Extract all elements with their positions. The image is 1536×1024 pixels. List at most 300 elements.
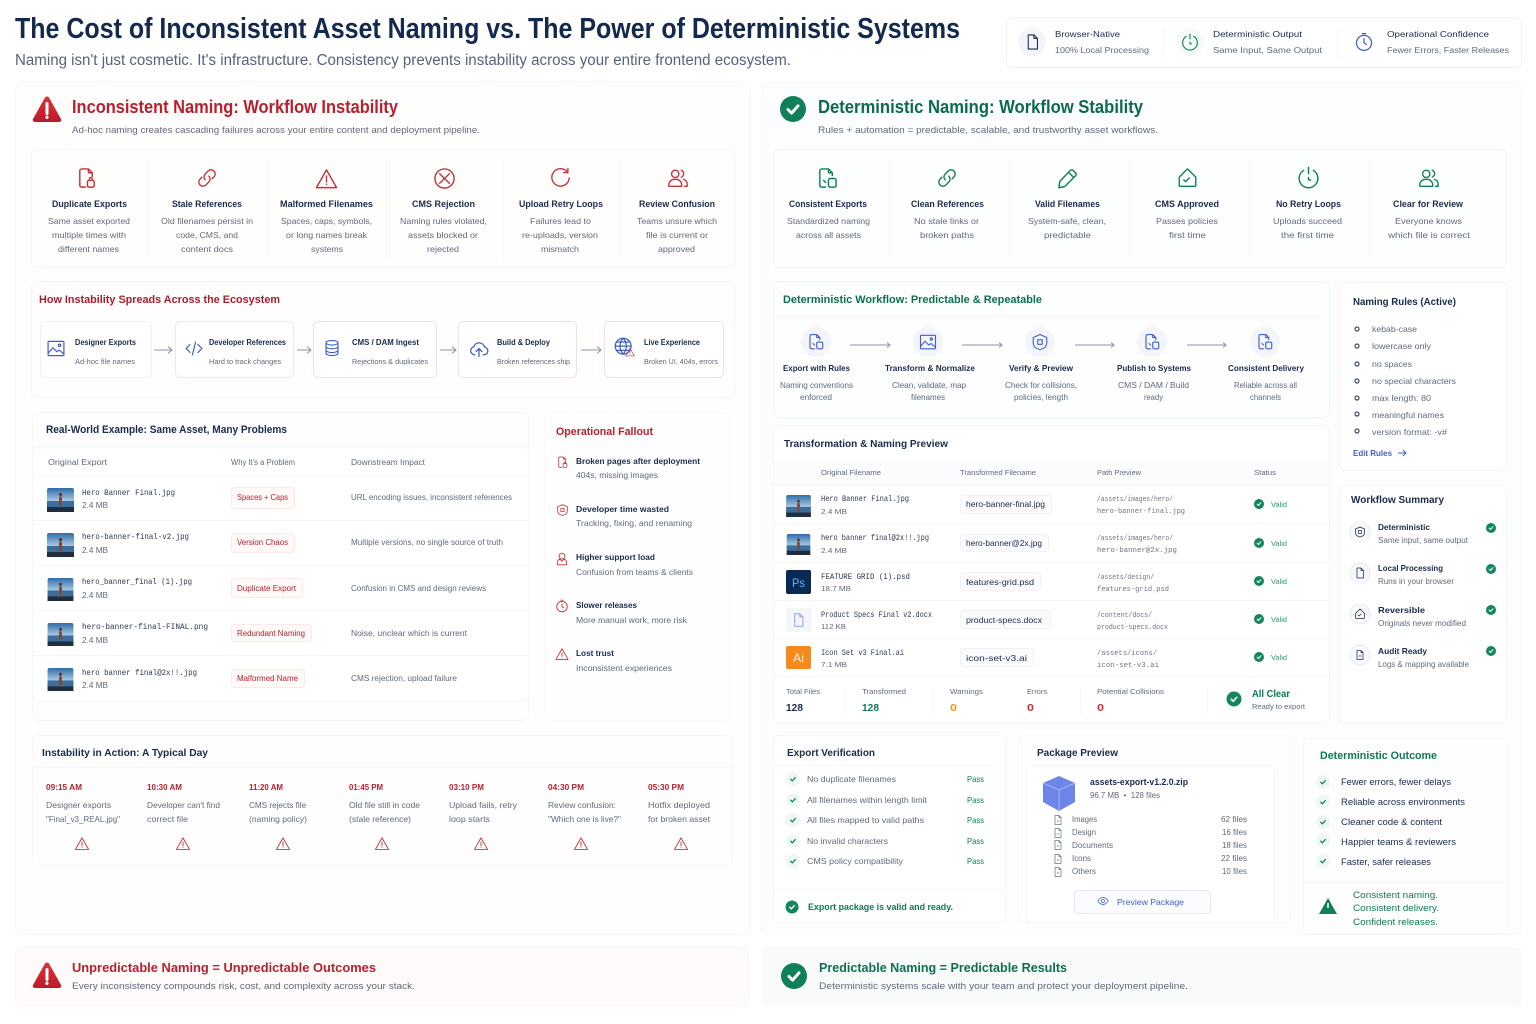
outcomes list: Happier teams & reviewers (1341, 837, 1457, 847)
benefit: consistent exports: across all assets (796, 230, 861, 240)
row: duplicate export: Confusion in CMS and design reviews (351, 584, 486, 593)
benefit: valid filenames: System-safe, clean, (1028, 216, 1106, 226)
event 10:30: Developer can't find (147, 800, 220, 810)
fallout: slower releases (557, 600, 688, 625)
check: no duplicate filenames: No duplicate filenames (807, 774, 896, 784)
badge: operational confidence: Fewer Errors, Faster Releases (1387, 45, 1509, 55)
preview row: hero banner final (786, 495, 1287, 517)
preview row: hero banner final: hero-banner-final.jpg (1097, 508, 1185, 516)
preview row: hero banner 2x (787, 534, 1287, 555)
preview table header: Original Filename (821, 468, 881, 477)
badge strip: product qualities (1006, 18, 1522, 68)
row: spaces + caps: Hero Banner Final.jpg (82, 488, 175, 498)
rules list: max length: 80 (1372, 393, 1431, 403)
benefit: no retry loops: No Retry Loops (1276, 199, 1341, 209)
badge: deterministic output: Same Input, Same Output (1213, 45, 1323, 55)
check: invalid characters: No invalid characters (807, 836, 888, 846)
problem: malformed filenames: systems (311, 244, 343, 254)
check: cms policy (786, 854, 984, 868)
row: duplicate export: 2.4 MB (82, 591, 108, 600)
timeline: a typical day (32, 736, 732, 866)
preview row: product specs: product-specs.docx (966, 615, 1043, 625)
callout: unpredictable outcomes: Every inconsistency compounds risk, cost, and complexity across your stack. (72, 981, 415, 992)
fallout: support load: Higher support load (576, 552, 655, 562)
panel heading: inconsistent: Inconsistent Naming: Workflow Instability (72, 97, 398, 117)
event 10:30: 10:30 AM (147, 783, 182, 792)
step: export with rules: Export with Rules (783, 363, 850, 373)
event 09:15: Designer exports (46, 800, 111, 810)
row: malformed name: hero banner final@2x!!.jpg (82, 668, 197, 678)
card: real-world example table: Real-World Example: Same Asset, Many Problems (46, 424, 287, 436)
card: package preview: Package Preview (1037, 748, 1118, 759)
problem: stale references: Stale References (172, 199, 242, 209)
badge: browser-native: 100% Local Processing (1055, 45, 1149, 55)
flow step: live experience: Broken UI, 404s, errors (644, 357, 718, 366)
benefit: clear for review: Clear for Review (1393, 199, 1464, 209)
callout: unpredictable outcomes (16, 948, 748, 1006)
step: transform and normalize: filenames (911, 393, 945, 402)
flow: deterministic workflow (774, 282, 1330, 418)
check: invalid characters (786, 834, 984, 848)
step: transform and normalize: Clean, validate, map (892, 381, 967, 390)
arrow (154, 346, 172, 354)
row: redundant naming: 2.4 MB (82, 636, 108, 645)
preview row: icon set: Valid (1271, 653, 1287, 662)
summary: reversible: Reversible (1378, 605, 1425, 615)
preview row: hero banner 2x: hero-banner@2x.jpg (966, 538, 1042, 548)
preview row: product specs (786, 608, 1287, 632)
row: spaces + caps: URL encoding issues, inconsistent references (351, 493, 512, 502)
badge: operational confidence (1356, 29, 1509, 55)
flow: deterministic workflow: Deterministic Workflow: Predictable & Repeatable (783, 294, 1042, 306)
card: export verification (774, 736, 1006, 922)
benefit: clear for review: Everyone knows (1395, 216, 1462, 226)
fallout: slower releases: Slower releases (576, 600, 637, 610)
card: workflow summary: Workflow Summary (1351, 495, 1444, 506)
problem: duplicate exports (48, 169, 130, 254)
outcomes list: Reliable across environments (1341, 797, 1466, 807)
benefit: cms approved: Passes policies (1156, 216, 1218, 226)
problem: malformed filenames: Spaces, caps, symbols, (281, 216, 372, 226)
problem: cms rejection: Naming rules violated, (400, 216, 487, 226)
row: redundant naming: hero-banner-final-FINAL.png (82, 622, 208, 632)
step: consistent delivery: Reliable across all (1234, 381, 1297, 390)
event 03:10: Upload fails, retry (449, 800, 518, 810)
rules list: no special characters (1372, 376, 1456, 386)
check: no duplicate filenames: Pass (967, 774, 984, 784)
problem: malformed filenames: Malformed Filenames (280, 199, 373, 209)
row: malformed name (48, 668, 458, 691)
stat: warnings (950, 687, 983, 714)
problem: upload retry loops: Upload Retry Loops (519, 199, 603, 209)
fallout: slower releases: More manual work, more risk (576, 615, 688, 625)
check: length limit: All filenames within length limit (807, 795, 928, 805)
event 11:20 (249, 783, 307, 849)
summary: deterministic: Same input, same output (1378, 536, 1469, 545)
preview row: hero banner final: Hero Banner Final.jpg (821, 495, 909, 504)
flow step: build and deploy (458, 322, 576, 378)
outcomes list: Fewer errors, fewer delays (1341, 777, 1452, 787)
event 10:30: correct file (147, 814, 188, 824)
problem: malformed filenames: or long names break (286, 230, 368, 240)
arrow (1187, 342, 1226, 348)
callout: predictable results: Predictable Naming = Predictable Results (819, 960, 1067, 975)
problem: duplicate exports: Duplicate Exports (52, 199, 127, 209)
problem: review confusion (637, 170, 717, 254)
step: publish to systems: ready (1144, 393, 1163, 402)
stat: warnings: 0 (950, 702, 957, 714)
link: edit rules: Edit Rules (1353, 448, 1392, 458)
preview row: product specs: /content/docs/ (1097, 612, 1152, 620)
summary: audit ready (1350, 645, 1496, 669)
stat: total files (786, 687, 820, 714)
benefit: valid filenames: Valid Filenames (1035, 199, 1100, 209)
fallout: developer time: Tracking, fixing, and renaming (576, 518, 692, 528)
preview row: hero banner final: Valid (1271, 500, 1287, 509)
row: version chaos: 2.4 MB (82, 546, 108, 555)
preview row: icon set (786, 646, 1287, 670)
stats row (786, 687, 1306, 714)
card: package preview (1018, 736, 1290, 922)
flow step: designer exports: Ad-hoc file names (75, 357, 135, 366)
problem: review confusion: Review Confusion (639, 199, 715, 209)
step: verify and preview: Verify & Preview (1009, 363, 1073, 373)
preview row: icon set: icon-set-v3.ai (1097, 662, 1159, 670)
problem: review confusion: file is current or (646, 230, 708, 240)
package name: assets-export-v1.2.0.zip (1090, 777, 1188, 787)
card: deterministic outcome: Deterministic Outcome (1320, 750, 1437, 762)
row: version chaos (47, 532, 503, 557)
problem: upload retry loops: re-uploads, version (522, 230, 598, 240)
table header: Downstream Impact (351, 458, 426, 467)
step: export with rules: enforced (800, 393, 832, 402)
flow step: live experience (604, 322, 724, 378)
event 09:15 (46, 783, 120, 849)
panel heading: inconsistent (33, 96, 480, 136)
event 01:45 (349, 783, 420, 849)
panel heading: deterministic: Deterministic Naming: Workflow Stability (818, 97, 1143, 117)
step: export with rules: Naming conventions (780, 381, 853, 390)
preview row: icon set: icon-set-v3.ai (966, 653, 1027, 663)
rules list: no spaces (1372, 359, 1412, 369)
subtitle: Naming isn't just cosmetic. It's infrastructure. Consistency prevents instability across your entire frontend ecosystem. (15, 52, 791, 69)
event 03:10 (449, 783, 518, 849)
status: all clear: Ready to export (1252, 702, 1306, 711)
rules list: meaningful names (1372, 410, 1444, 420)
rules list: kebab-case (1372, 324, 1417, 334)
problem: cms rejection: rejected (427, 244, 459, 254)
preview row: icon set: 7.1 MB (821, 660, 847, 669)
arrow (850, 342, 890, 348)
flow step: designer exports (40, 322, 152, 378)
stat: total files: Total Files (786, 687, 820, 696)
fallout: lost trust: Inconsistent experiences (576, 663, 672, 673)
event 11:20: CMS rejects file (249, 800, 306, 810)
preview row: product specs: 112 KB (821, 622, 846, 631)
check: cms policy: CMS policy compatibility (807, 856, 904, 866)
event 09:15: 09:15 AM (46, 783, 82, 792)
package contents list: Others (1072, 867, 1096, 876)
card: operational fallout: Operational Fallout (556, 426, 653, 438)
stat: transformed: 128 (862, 702, 879, 714)
rules list: lowercase only (1372, 341, 1432, 351)
benefit: clean references: No stale links or (914, 216, 979, 226)
card: deterministic outcome (1304, 738, 1508, 934)
summary: local processing (1350, 563, 1496, 586)
arrow (962, 342, 1002, 348)
preview row: product specs: product-specs.docx (1097, 624, 1168, 632)
flow step: live experience: Live Experience (644, 338, 701, 347)
card: workflow summary (1340, 486, 1506, 724)
preview row: icon set: Ai (793, 651, 804, 665)
summary: local processing: Runs in your browser (1378, 577, 1454, 586)
card: export verification: Export Verification (787, 748, 875, 759)
check: valid paths (786, 813, 984, 827)
stat: warnings: Warnings (950, 687, 983, 696)
rules list (1355, 324, 1456, 437)
event 01:45: 01:45 PM (349, 783, 383, 792)
benefit: valid filenames (1028, 170, 1106, 240)
preview row: feature grid: /assets/design/ (1097, 574, 1154, 582)
step: transform and normalize (885, 327, 975, 402)
badge: operational confidence: Operational Confidence (1387, 29, 1489, 39)
arrow (1075, 342, 1114, 348)
row: spaces + caps: Spaces + Caps (237, 493, 288, 502)
panel heading: deterministic (780, 96, 1158, 136)
outcomes list (1316, 775, 1466, 868)
row: redundant naming (48, 622, 468, 646)
event 05:30: for broken asset (648, 814, 711, 824)
stat: potential collisions: Potential Collisions (1097, 687, 1164, 696)
summary: reversible: Originals never modified (1378, 619, 1466, 628)
step: verify and preview: Check for collisions, (1005, 381, 1077, 390)
outcome summary: Confident releases. (1353, 917, 1438, 927)
preview table header: Status (1254, 468, 1276, 477)
card: naming rules: Naming Rules (Active) (1353, 297, 1456, 308)
row: spaces + caps (47, 488, 512, 512)
step: consistent delivery: channels (1250, 393, 1281, 402)
row: malformed name: CMS rejection, upload failure (351, 674, 458, 683)
fallout: broken pages: Broken pages after deployment (576, 456, 700, 466)
badge: deterministic output (1176, 28, 1323, 56)
event 01:45: Old file still in code (349, 800, 420, 810)
event 10:30 (147, 783, 220, 849)
stat: potential collisions (1097, 687, 1164, 714)
preview table header: Path Preview (1097, 468, 1142, 477)
stat: total files: 128 (786, 702, 803, 714)
preview row: feature grid: Valid (1271, 577, 1287, 586)
status: export valid: Export package is valid and ready. (808, 902, 953, 912)
outcome summary: Consistent delivery. (1353, 903, 1439, 913)
card: naming rules (1340, 282, 1506, 470)
benefit: consistent exports: Standardized naming (787, 216, 870, 226)
problem: upload retry loops (519, 168, 603, 254)
event 05:30: 05:30 PM (648, 783, 684, 792)
callout: predictable results (762, 948, 1522, 1006)
step: consistent delivery (1228, 327, 1304, 402)
callout: predictable results: Deterministic systems scale with your team and protect your deployment pipeline. (819, 981, 1188, 992)
benefit: no retry loops: the first time (1281, 230, 1334, 240)
problem: review confusion: Teams unsure which (637, 216, 717, 226)
event 03:10: loop starts (449, 814, 490, 824)
preview table header (821, 468, 1276, 477)
fallout: developer time: Developer time wasted (576, 504, 669, 514)
package contents list: Design (1072, 828, 1096, 837)
flow step: designer exports: Designer Exports (75, 338, 136, 347)
summary: audit ready: Logs & mapping available (1378, 660, 1470, 669)
preview row: hero banner final: /assets/images/hero/ (1097, 496, 1173, 504)
card: transformation preview table (774, 426, 1330, 724)
benefit: valid filenames: predictable (1044, 230, 1091, 240)
benefit: no retry loops: Uploads succeed (1273, 216, 1342, 226)
summary: reversible (1350, 604, 1496, 628)
fallout: support load: Confusion from teams & clients (576, 567, 693, 577)
problem: review confusion: approved (658, 244, 695, 254)
outcomes list: Faster, safer releases (1341, 857, 1432, 867)
package contents list (1055, 815, 1247, 876)
event 11:20: (naming policy) (249, 814, 307, 824)
row: version chaos: Version Chaos (237, 538, 288, 547)
stat: transformed (862, 687, 906, 714)
preview row: hero banner 2x: Valid (1271, 539, 1287, 548)
arrow (297, 346, 311, 354)
event 04:30: 04:30 PM (548, 783, 584, 792)
stat: potential collisions: 0 (1097, 702, 1104, 714)
package contents list: 18 files (1222, 841, 1247, 850)
status: export valid (786, 900, 953, 914)
package contents list: 62 files (1221, 815, 1247, 824)
row: malformed name: Malformed Name (237, 674, 299, 683)
problem: malformed filenames (280, 170, 373, 254)
badge: browser-native (1018, 28, 1149, 56)
arrow (440, 346, 456, 354)
check: valid paths: Pass (967, 815, 984, 825)
benefit: cms approved: first time (1169, 230, 1206, 240)
table header (48, 458, 426, 467)
package name (1090, 777, 1188, 800)
rules list: version format: -v# (1372, 427, 1447, 437)
preview row: feature grid: 18.7 MB (821, 584, 851, 593)
flow step: cms dam ingest: Rejections & duplicates (352, 357, 428, 366)
event 03:10: 03:10 PM (449, 783, 484, 792)
step: transform and normalize: Transform & Normalize (885, 363, 975, 373)
preview row: icon set: Icon Set v3 Final.ai (821, 649, 904, 658)
status: all clear (1226, 689, 1306, 711)
outcome summary: Consistent naming. (1353, 890, 1438, 900)
row: duplicate export (48, 577, 486, 601)
outcomes list: Cleaner code & content (1341, 817, 1443, 827)
event 01:45: (stale reference) (349, 814, 411, 824)
package contents list: 22 files (1221, 854, 1247, 863)
preview row: hero banner 2x: hero banner final@2x!!.jpg (821, 534, 929, 543)
card: real-world example table (32, 412, 528, 720)
callout: unpredictable outcomes: Unpredictable Naming = Unpredictable Outcomes (72, 960, 376, 975)
step: verify and preview (1005, 327, 1077, 402)
problem: stale references: content docs (181, 244, 233, 254)
flow step: cms dam ingest (314, 322, 436, 378)
benefit: consistent exports: Consistent Exports (789, 199, 867, 209)
fallout: broken pages: 404s, missing images (576, 470, 658, 480)
card: transformation preview table: Transformation & Naming Preview (784, 438, 949, 450)
arrow (581, 346, 601, 354)
stat: errors: Errors (1027, 687, 1047, 696)
table header: Why It's a Problem (231, 458, 295, 467)
preview table header: Transformed Filename (960, 468, 1036, 477)
flow step: build and deploy: Build & Deploy (497, 338, 551, 347)
fallout: broken pages (559, 456, 700, 480)
check: length limit (786, 793, 984, 807)
preview row: product specs: Product Specs Final v2.docx (821, 611, 932, 620)
problem: upload retry loops: mismatch (541, 244, 579, 254)
fallout: lost trust: Lost trust (576, 648, 614, 658)
fallout: support load (557, 552, 693, 577)
flow: how instability spreads: How Instability Spreads Across the Ecosystem (39, 294, 280, 306)
event 05:30 (648, 783, 711, 849)
preview row: hero banner 2x: hero-banner@2x.jpg (1097, 547, 1177, 555)
benefit: cms approved: CMS Approved (1155, 199, 1219, 209)
preview row: hero banner final: 2.4 MB (821, 507, 847, 516)
problem: cms rejection: assets blocked or (408, 230, 478, 240)
summary: deterministic: Deterministic (1378, 522, 1430, 532)
stat: errors: 0 (1027, 702, 1034, 714)
flow: how instability spreads (32, 282, 734, 398)
check: invalid characters: Pass (967, 836, 984, 846)
row: version chaos: Multiple versions, no single source of truth (351, 538, 503, 547)
panel: deterministic naming (762, 82, 1522, 934)
row: duplicate export: Duplicate Export (237, 584, 297, 593)
preview row: product specs: Valid (1271, 615, 1287, 624)
problem: stale references: Old filenames persist in (161, 216, 253, 226)
step: export with rules (780, 327, 853, 402)
card: operational fallout (544, 412, 730, 720)
panel heading: deterministic: Rules + automation = predictable, scalable, and trustworthy asset workflows. (818, 125, 1158, 136)
step: verify and preview: policies, length (1014, 393, 1068, 402)
problem: duplicate exports: Same asset exported (48, 216, 130, 226)
flow step: build and deploy: Broken references ship (497, 357, 570, 366)
check: length limit: Pass (967, 795, 984, 805)
badge: browser-native: Browser-Native (1055, 29, 1120, 39)
event 11:20: 11:20 AM (249, 783, 283, 792)
button: preview package (1074, 890, 1210, 914)
timeline: a typical day: Instability in Action: A Typical Day (42, 747, 208, 759)
summary: audit ready: Audit Ready (1378, 646, 1427, 656)
fallout: developer time (558, 504, 692, 528)
benefit: clean references (911, 170, 984, 240)
problem: cms rejection: CMS Rejection (412, 199, 475, 209)
preview row: feature grid: Ps (792, 576, 805, 590)
panel: inconsistent naming (16, 82, 750, 934)
benefit: no retry loops (1273, 167, 1342, 240)
benefit: clear for review (1387, 170, 1471, 240)
summary: deterministic (1350, 522, 1496, 545)
package contents list: 10 files (1222, 867, 1247, 876)
status: all clear: All Clear (1252, 689, 1290, 700)
preview row: hero banner 2x: /assets/images/hero/ (1097, 535, 1173, 543)
flow step: developer references: Hard to track changes (209, 357, 281, 366)
outcome summary (1319, 890, 1439, 927)
problem: upload retry loops: Failures lead to (530, 216, 591, 226)
stat: errors (1027, 687, 1047, 714)
event 09:15: "Final_v3_REAL.jpg" (46, 814, 120, 824)
preview row: feature grid: features-grid.psd (966, 577, 1034, 587)
row: duplicate export: hero_banner_final (1).jpg (82, 577, 192, 587)
benefit: consistent exports (787, 169, 870, 240)
benefit: clear for review: which file is correct (1387, 230, 1471, 240)
check: cms policy: Pass (967, 856, 984, 866)
step: publish to systems (1117, 327, 1191, 402)
preview row: icon set: /assets/icons/ (1097, 650, 1157, 658)
panel heading: inconsistent: Ad-hoc naming creates cascading failures across your entire content and deployment pipeline. (72, 125, 480, 136)
